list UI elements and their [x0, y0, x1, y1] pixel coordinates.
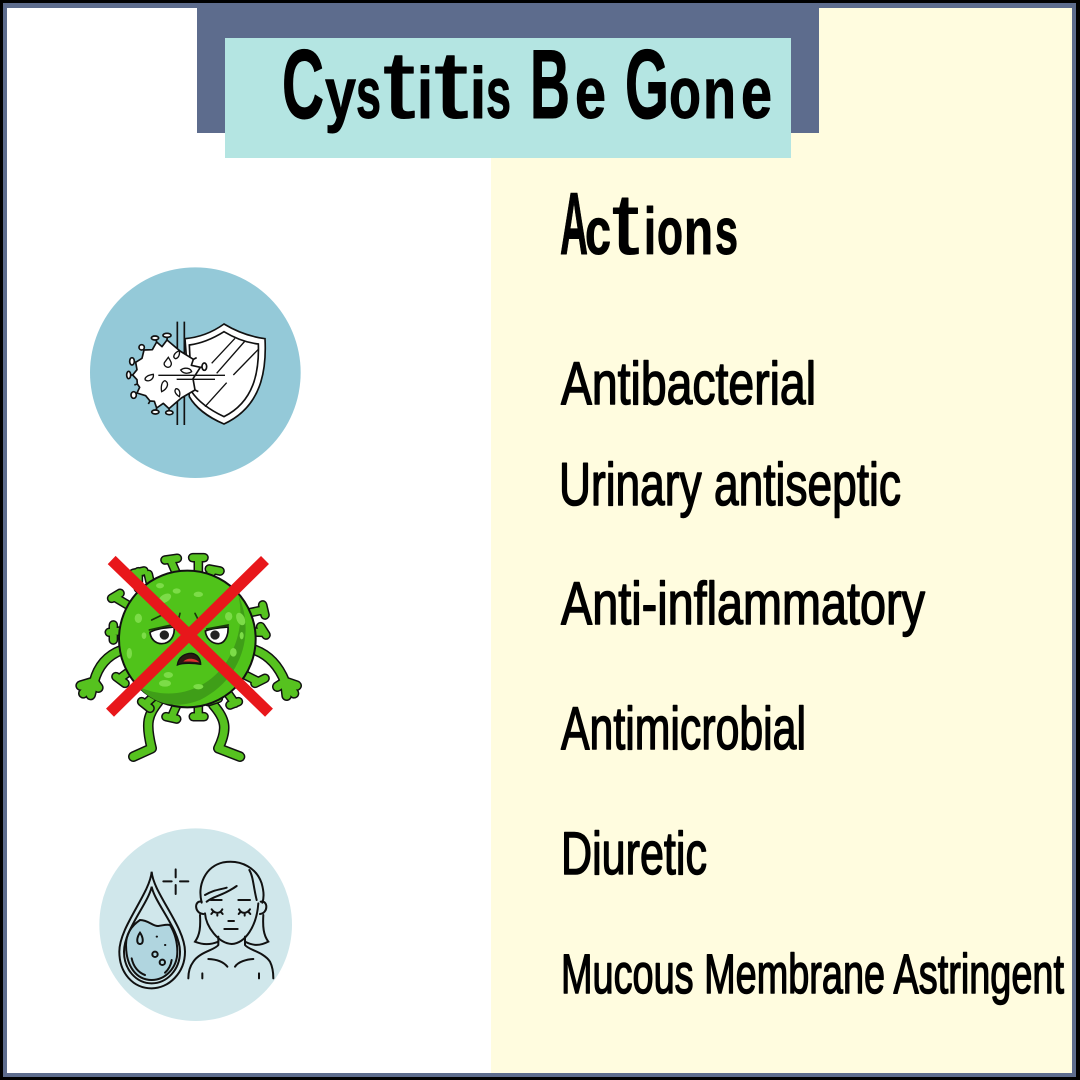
title: e — [741, 54, 772, 134]
heading: Actions: o — [657, 194, 683, 268]
title: t — [434, 32, 468, 139]
heading: Actions: A — [560, 174, 588, 273]
action: Antimicrobial: Antimicrobial — [561, 695, 806, 762]
heading: Actions: t — [612, 177, 639, 273]
red cross — [110, 560, 269, 713]
heading: Actions: c — [585, 194, 611, 268]
heading: Actions: s — [715, 194, 738, 268]
icon: crossed-out green virus — [81, 558, 297, 757]
title banner — [197, 8, 819, 158]
title: s — [486, 54, 511, 134]
title: s — [356, 54, 381, 134]
title: e — [575, 54, 606, 134]
title: t — [383, 32, 415, 139]
virus spikes — [109, 558, 266, 719]
action: Anti-inflammatory: Anti-inflammatory — [561, 570, 925, 637]
panel: actions background — [491, 8, 1072, 1073]
icon: virus blocked by shield — [90, 267, 301, 478]
title: i — [417, 54, 433, 134]
title: y — [325, 54, 356, 134]
title: G — [625, 29, 669, 139]
action: Urinary antiseptic: Urinary antiseptic — [559, 451, 901, 518]
title: n — [703, 54, 736, 134]
heading: Actions: i — [644, 194, 656, 268]
title: o — [669, 54, 701, 134]
virus eyes and mouth — [149, 613, 228, 665]
title: i — [470, 54, 486, 134]
action: Antibacterial: Antibacterial — [561, 350, 816, 417]
icon: water drop and woman — [99, 828, 292, 1021]
virus body — [119, 571, 256, 707]
title: C — [282, 29, 324, 139]
heading: Actions: n — [684, 194, 713, 268]
title: B — [530, 29, 570, 139]
list: actions — [559, 350, 1064, 1005]
virus limbs — [81, 650, 297, 757]
action: Diuretic: Diuretic — [561, 820, 707, 887]
